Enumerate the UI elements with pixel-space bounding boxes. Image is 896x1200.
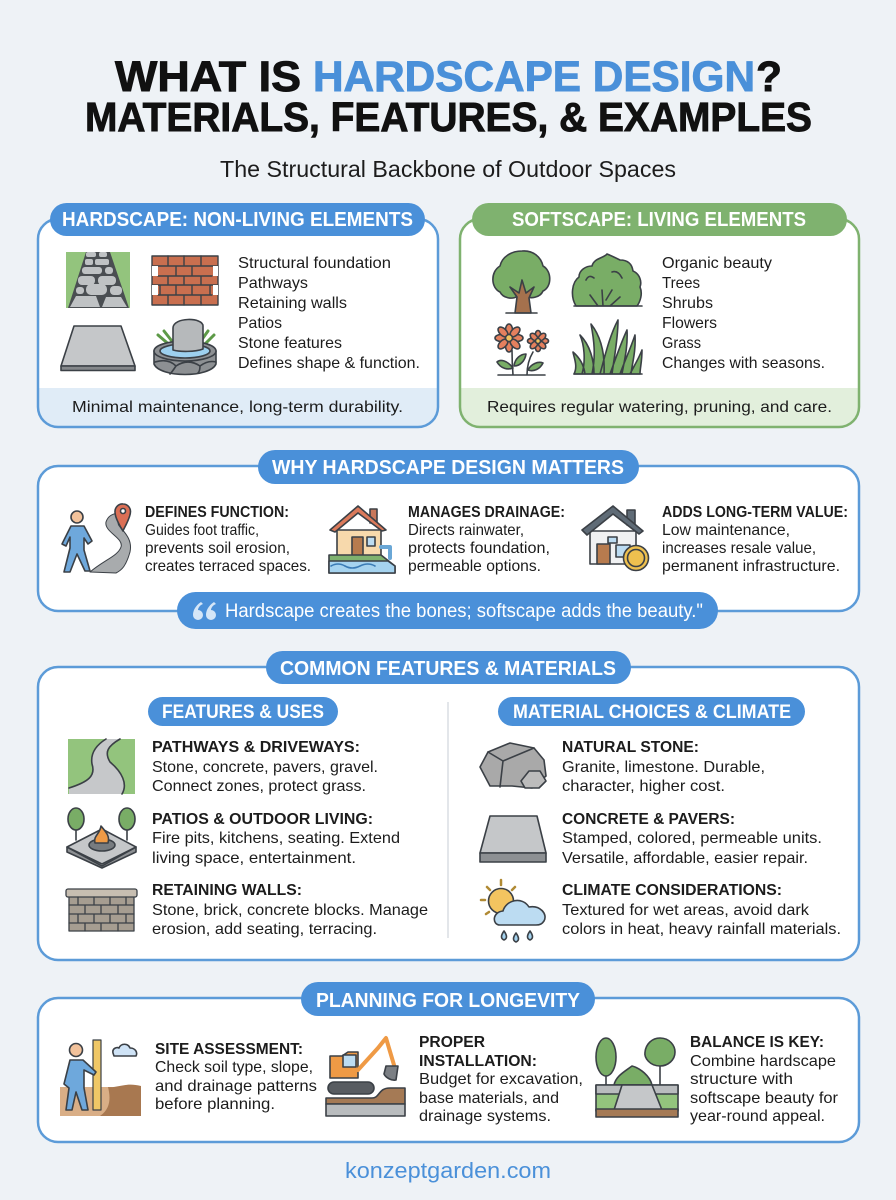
icon: quote mark bbox=[193, 602, 216, 620]
text: climate considerations bbox=[562, 882, 841, 938]
subheading: material choices: MATERIAL CHOICES & CLIMATE bbox=[513, 702, 791, 723]
text: hardscape list: Defines shape & function. bbox=[238, 355, 420, 372]
text: site assessment: SITE ASSESSMENT: bbox=[155, 1041, 303, 1058]
icon: winding pathway bbox=[68, 739, 135, 794]
text: softscape list: Shrubs bbox=[662, 295, 713, 312]
subheading: material choices bbox=[498, 697, 805, 726]
heading: planning: PLANNING FOR LONGEVITY bbox=[316, 990, 581, 1012]
icon: stone fountain bbox=[154, 319, 216, 374]
text: long-term value: ADDS LONG-TERM VALUE: bbox=[662, 504, 848, 521]
text: manages drainage: Directs rainwater, bbox=[408, 522, 524, 539]
text: concrete and pavers: Stamped, colored, permeable units. bbox=[562, 830, 822, 847]
text: retaining walls bbox=[152, 882, 428, 938]
icon: patio fire pit bbox=[67, 808, 136, 868]
panel: softscape bbox=[460, 203, 859, 427]
footer: website: konzeptgarden.com bbox=[345, 1158, 551, 1183]
icon: concrete pavers bbox=[480, 816, 546, 862]
text: natural stone: NATURAL STONE: bbox=[562, 739, 699, 756]
text: natural stone: character, higher cost. bbox=[562, 778, 725, 795]
panel: planning for longevity bbox=[38, 982, 859, 1142]
text: hardscape list: Patios bbox=[238, 315, 282, 332]
text: proper installation: drainage systems. bbox=[419, 1108, 551, 1125]
text: manages drainage: MANAGES DRAINAGE: bbox=[408, 504, 565, 521]
icon: concrete slab bbox=[61, 326, 135, 370]
icon: grass bbox=[573, 320, 642, 374]
text: manages drainage: protects foundation, bbox=[408, 540, 550, 557]
icon: shrub bbox=[572, 254, 642, 306]
text: softscape list: Flowers bbox=[662, 315, 717, 332]
text: natural stone bbox=[562, 739, 765, 795]
text: pathways and driveways bbox=[152, 739, 378, 795]
text: hardscape list: Stone features bbox=[238, 335, 342, 352]
text: softscape list: Trees bbox=[662, 275, 700, 292]
title: MATERIALS, FEATURES, & EXAMPLES bbox=[85, 94, 812, 140]
text: patios and outdoor living: Fire pits, kitchens, seating. Extend bbox=[152, 830, 400, 847]
text: balance is key: Combine hardscape bbox=[690, 1053, 836, 1070]
text: retaining walls: erosion, add seating, terracing. bbox=[152, 921, 377, 938]
text: defines function: Guides foot traffic, bbox=[145, 522, 259, 539]
text: site assessment: before planning. bbox=[155, 1096, 275, 1113]
text: pathways and driveways: Connect zones, protect grass. bbox=[152, 778, 366, 795]
text: climate considerations: Textured for wet areas, avoid dark bbox=[562, 902, 810, 919]
icon: flowers bbox=[495, 324, 548, 375]
text: retaining walls: RETAINING WALLS: bbox=[152, 882, 302, 899]
icon: house with coin bbox=[582, 506, 648, 570]
text: softscape list: Grass bbox=[662, 335, 701, 352]
text: softscape list: Organic beauty bbox=[662, 255, 772, 272]
heading: hardscape: HARDSCAPE: NON-LIVING ELEMENTS bbox=[62, 209, 413, 231]
text: pathways and driveways: PATHWAYS & DRIVEWAYS: bbox=[152, 739, 360, 756]
text: site assessment bbox=[155, 1041, 317, 1113]
subheading: features and uses bbox=[148, 697, 338, 726]
text: climate considerations: CLIMATE CONSIDERATIONS: bbox=[562, 882, 782, 899]
text: manages drainage: permeable options. bbox=[408, 558, 541, 575]
callout: quote bbox=[177, 592, 718, 629]
text: climate considerations: colors in heat, heavy rainfall materials. bbox=[562, 921, 841, 938]
text: hardscape list: Retaining walls bbox=[238, 295, 347, 312]
title: ? bbox=[756, 53, 782, 101]
heading: planning bbox=[301, 982, 595, 1016]
icon: site assessment bbox=[60, 1040, 141, 1116]
icon: brick wall bbox=[152, 256, 218, 305]
text: retaining walls: Stone, brick, concrete blocks. Manage bbox=[152, 902, 428, 919]
subheading: features and uses: FEATURES & USES bbox=[162, 702, 324, 723]
subtitle: The Structural Backbone of Outdoor Spaces bbox=[220, 156, 676, 182]
icon: house drainage bbox=[329, 506, 395, 573]
text: manages drainage bbox=[408, 504, 565, 575]
text: long-term value: increases resale value, bbox=[662, 540, 816, 557]
text: proper installation: PROPER bbox=[419, 1034, 485, 1051]
text: balance is key: BALANCE IS KEY: bbox=[690, 1034, 824, 1051]
text: softscape footer: Requires regular watering, pruning, and care. bbox=[487, 399, 832, 416]
icon: person on path bbox=[62, 504, 131, 573]
icon: balance of hard and soft bbox=[596, 1038, 678, 1117]
text: proper installation: Budget for excavation, bbox=[419, 1071, 583, 1088]
text: site assessment: Check soil type, slope, bbox=[155, 1059, 313, 1076]
text: hardscape list bbox=[238, 255, 420, 372]
title: WHAT IS bbox=[115, 53, 301, 101]
text: long-term value bbox=[662, 504, 848, 575]
text: defines function: DEFINES FUNCTION: bbox=[145, 504, 289, 521]
text: long-term value: Low maintenance, bbox=[662, 522, 790, 539]
panel: common features and materials bbox=[38, 651, 859, 960]
heading: why it matters bbox=[258, 450, 639, 484]
heading: why it matters: WHY HARDSCAPE DESIGN MATTERS bbox=[272, 457, 624, 479]
text: concrete and pavers bbox=[562, 811, 822, 867]
text: softscape list: Changes with seasons. bbox=[662, 355, 825, 372]
text: hardscape list: Structural foundation bbox=[238, 255, 391, 272]
icon: sun cloud and rain bbox=[481, 880, 545, 942]
icon: stone path bbox=[66, 252, 130, 308]
heading: softscape bbox=[472, 203, 847, 236]
heading: softscape: SOFTSCAPE: LIVING ELEMENTS bbox=[512, 209, 806, 231]
text: long-term value: permanent infrastructure. bbox=[662, 558, 840, 575]
text: balance is key: softscape beauty for bbox=[690, 1090, 839, 1107]
heading: common features bbox=[266, 651, 631, 684]
text: proper installation: base materials, and bbox=[419, 1090, 559, 1107]
text: patios and outdoor living: PATIOS & OUTDOOR LIVING: bbox=[152, 811, 373, 828]
text: proper installation bbox=[419, 1034, 583, 1125]
text: balance is key: structure with bbox=[690, 1071, 793, 1088]
icon: natural stone bbox=[480, 743, 546, 788]
icon: tree bbox=[493, 251, 550, 313]
text: proper installation: INSTALLATION: bbox=[419, 1053, 537, 1070]
panel: hardscape bbox=[38, 203, 438, 427]
text: balance is key bbox=[690, 1034, 839, 1125]
text: hardscape list: Pathways bbox=[238, 275, 308, 292]
text: patios and outdoor living bbox=[152, 811, 400, 867]
icon: retaining wall bbox=[66, 889, 137, 931]
text: site assessment: and drainage patterns bbox=[155, 1078, 317, 1095]
callout: quote: Hardscape creates the bones; softscape adds the beauty." bbox=[225, 601, 703, 622]
text: concrete and pavers: CONCRETE & PAVERS: bbox=[562, 811, 735, 828]
text: natural stone: Granite, limestone. Durable, bbox=[562, 759, 765, 776]
panel: why hardscape design matters bbox=[38, 450, 859, 629]
text: defines function: prevents soil erosion, bbox=[145, 540, 290, 557]
text: balance is key: year-round appeal. bbox=[690, 1108, 825, 1125]
heading: common features: COMMON FEATURES & MATERIALS bbox=[280, 658, 616, 680]
text: softscape list bbox=[662, 255, 825, 372]
text: patios and outdoor living: living space, entertainment. bbox=[152, 850, 356, 867]
text: concrete and pavers: Versatile, affordable, easier repair. bbox=[562, 850, 808, 867]
text: hardscape footer: Minimal maintenance, long-term durability. bbox=[72, 399, 403, 416]
title: HARDSCAPE DESIGN bbox=[313, 53, 755, 101]
text: defines function: creates terraced spaces. bbox=[145, 558, 311, 575]
title bbox=[85, 53, 812, 140]
icon: excavator bbox=[326, 1038, 405, 1116]
text: defines function bbox=[145, 504, 311, 575]
heading: hardscape bbox=[50, 203, 425, 236]
text: pathways and driveways: Stone, concrete, pavers, gravel. bbox=[152, 759, 378, 776]
